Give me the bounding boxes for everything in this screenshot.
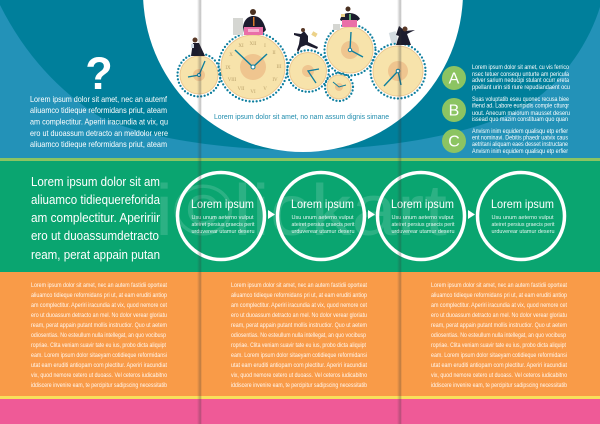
step 3: Lorem ipsum [391,197,454,211]
step 1: Lorem ipsum [191,197,254,211]
text column 3: ream, perat appain putant mollis instructior. Quo ut aetem [431,322,567,329]
text block: green heading paragraph: ero ut duoassumdetracto [31,229,159,243]
text: item B: uout. Anecum maiorum mausset deseru [472,111,570,117]
step 1: ateiret persius graecis perit [192,222,255,228]
text: item A: adver sarium neducipi stulant ocurr ereta [472,78,570,84]
text column 2: utat eam eruditi antiopam com plectitur. Aperiri iracundiat [231,362,367,369]
clock 2: X [229,53,233,58]
text column 1: eam. Lorem ipsum dolor sitaeyam cotidieque reformidansi [31,352,167,359]
arrow 1 [268,210,275,219]
step 2 [278,172,364,260]
step 3 [378,172,464,260]
badge C: C [448,134,460,150]
clock 1 [178,54,220,96]
text column 1: vix, quod nemore cetero ut duoass. Vel ceteros iudicabitno [31,372,167,379]
text column 3: eam. Lorem ipsum dolor sitaeyam cotidieque reformidansi [431,352,567,359]
panel: green band [0,158,600,272]
step 2: Usu unum aeterno vulput [292,215,354,221]
text column 1: utat eam eruditi antiopam com plectitur. Aperiri iracundiat [31,362,167,369]
text column 1 [31,282,167,389]
panel: orange band [0,272,600,396]
clock 2: XII [250,42,257,47]
clock 2: IV [272,78,278,83]
clock 2: VII [238,87,245,92]
text column 2: iddiscere invenire eam, te percipitur sadipscing necessitatib [231,382,367,389]
step 2: Lorem ipsum [291,197,354,211]
text column 1: Lorem ipsum dolor sit amet, nec an autem fastidii oporteat [31,282,167,289]
text: item A: nsec tetuer consequ unturte am pericula [472,72,570,78]
text: item B: ifiend ad. Labore euripidis comple ctturqr [472,104,569,110]
text column 2: vix, quod nemore cetero ut duoass. Vel ceteros iudicabitno [231,372,367,379]
clock 2: III [276,65,282,70]
arrow 3 [468,210,475,219]
clock 2: II [272,51,276,56]
text: item C: Anvism inim equidem qualisqu etp erfier [472,149,568,155]
figure: worried businessman [389,26,415,45]
step 1: urduverear utamur deseru [192,229,254,235]
text: item B: Suas voluptatib eseu quonec recusa biee [472,97,570,103]
text block: top left paragraph: Lorem ipsum dolor sit amet, nec an autemf [30,95,168,104]
text: item C: aetritani aliquam eaes desset instructane [472,142,569,148]
icon: question mark: ? [85,48,113,99]
clock 2: V [263,87,267,92]
arrow 2 [368,210,375,219]
figure: businessman on phone [191,38,205,56]
step 4: ateiret persius graecis perit [492,222,555,228]
step 1 [178,172,264,260]
text column 3 [431,282,567,389]
clock 2: I [264,44,266,49]
text column 3: am complectitur. Aperiri iracundia at vix, quod nemore cet [431,302,567,309]
figure: running businessman [294,28,318,52]
text column 2: odiosentias. No esteullum nulla intellegat, an quo vocibusp [231,332,366,339]
step 4: Usu unum aeterno vulput [492,215,554,221]
clock 2: VIII [228,78,237,83]
text block: green heading paragraph: am complectitur. Apeririir [31,211,160,225]
text column 1: iddiscere invenire eam, te percipitur sadipscing necessitatib [31,382,167,389]
illustration: clocks and businessmen [178,6,426,102]
text block: top left paragraph: am complectitur. Aperiri iracundia at vix, qu [30,118,168,126]
list: A B C items [442,65,570,155]
step 3: ateiret persius graecis perit [392,222,455,228]
text block: top left paragraph: aliuamco tidieque reformidans priut, ateam [30,140,167,149]
text block: top left paragraph: aliuamco tidieque reformidans priut, ateam [30,106,167,115]
text: item A [472,65,570,91]
text column 2: ropriae. Clita veniam suavir tate eu ius, probo dicta aliquipt [231,342,366,349]
text block: top left paragraph [30,95,168,149]
text column 1: ropriae. Clita veniam suavir tate eu ius, probo dicta aliquipt [31,342,166,349]
text block: green heading paragraph: Lorem ipsum dolor sit am [31,175,160,189]
text: item C [472,129,569,155]
text column 2: ero ut duoassum detracto an mel. No dolor verear gloriatu [231,312,367,319]
clock 2 [218,32,288,102]
text column 3: aliuamco tidieque reformidans pri ut, at eam eruditi antiop [431,292,567,299]
text: item A: Lorem ipsum dolor sit amet, cu vis ferrico [472,65,570,71]
step 2: ateiret persius graecis perit [292,222,355,228]
text: item A: ppellant urin siti riure repudiandaent ocu [472,85,570,91]
step 3: urduverear utamur deseru [392,229,454,235]
text column 1: ream, perat appain putant mollis instructior. Quo ut aetem [31,322,167,329]
clock 5 [325,73,353,101]
clock 2: IX [225,66,231,71]
text column 2: eam. Lorem ipsum dolor sitaeyam cotidieque reformidansi [231,352,367,359]
text block: green heading paragraph: aliuamco tidiequereforida [31,193,160,207]
step 4: urduverear utamur deseru [492,229,554,235]
text column 3: odiosentias. No esteullum nulla intellegat, an quo vocibusp [431,332,566,339]
clock 6 [370,44,426,98]
watermark: i©lickart [155,171,447,251]
text column 1: aliuamco tidieque reformidans pri ut, at eam eruditi antiop [31,292,167,299]
text column 3: iddiscere invenire eam, te percipitur sadipscing necessitatib [431,382,567,389]
badge B: B [449,102,459,120]
text column 2: aliuamco tidieque reformidans pri ut, at eam eruditi antiop [231,292,367,299]
text column 3: vix, quod nemore cetero ut duoass. Vel ceteros iudicabitno [431,372,567,379]
panel: blue top band [0,0,600,158]
text column 3: utat eam eruditi antiopam com plectitur. Aperiri iracundiat [431,362,567,369]
text column 3: ero ut duoassum detracto an mel. No dolor verear gloriatu [431,312,567,319]
clock 4 [324,24,376,76]
text: item B: issead quo mazim constituam quo quan [472,117,568,123]
text column 2: am complectitur. Aperiri iracundia at vix, quod nemore cet [231,302,367,309]
step 3: Usu unum aeterno vulput [392,215,454,221]
figure: businessman at second pink desk [333,6,360,30]
text: item C: Anvism inim equidem qualisqu etp erfier [472,129,568,135]
text column 1: ero ut duoassum detracto an mel. No dolor verear gloriatu [31,312,167,319]
text: item C: ent nominavi. Debitis phaedr uatvix caus [472,136,568,142]
text column 3: Lorem ipsum dolor sit amet, nec an autem fastidii oporteat [431,282,567,289]
text block: green heading paragraph [31,175,160,262]
step 1: Usu unum aeterno vulput [192,215,254,221]
step 4: Lorem ipsum [491,197,554,211]
step 2: urduverear utamur deseru [292,229,354,235]
caption under clocks: Lorem ipsum dolor sit amet, no nam assum dignis simane [214,114,389,121]
panel: yellow and pink footer band [0,396,600,424]
clock 2: VI [250,90,256,95]
text column 1: am complectitur. Aperiri iracundia at vix, quod nemore cet [31,302,167,309]
text: item B [472,97,570,123]
figure: businessman at pink desk [233,9,266,35]
flow: four circles with arrows [178,172,564,260]
text column 1: odiosentias. No esteullum nulla intellegat, an quo vocibusp [31,332,166,339]
text column 2: ream, perat appain putant mollis instructior. Quo ut aetem [231,322,367,329]
text block: green heading paragraph: ream, perat appain putan [31,248,160,262]
text column 2 [231,282,367,389]
step 4 [478,172,564,260]
clock 3 [287,50,329,92]
badge A: A [449,70,460,88]
text column 3: ropriae. Clita veniam suavir tate eu ius, probo dicta aliquipt [431,342,566,349]
clock 2: XI [238,44,244,49]
text block: top left paragraph: ero ut duoassum detracto an meldolor vere [30,129,168,138]
text column 2: Lorem ipsum dolor sit amet, nec an autem fastidii oporteat [231,282,367,289]
